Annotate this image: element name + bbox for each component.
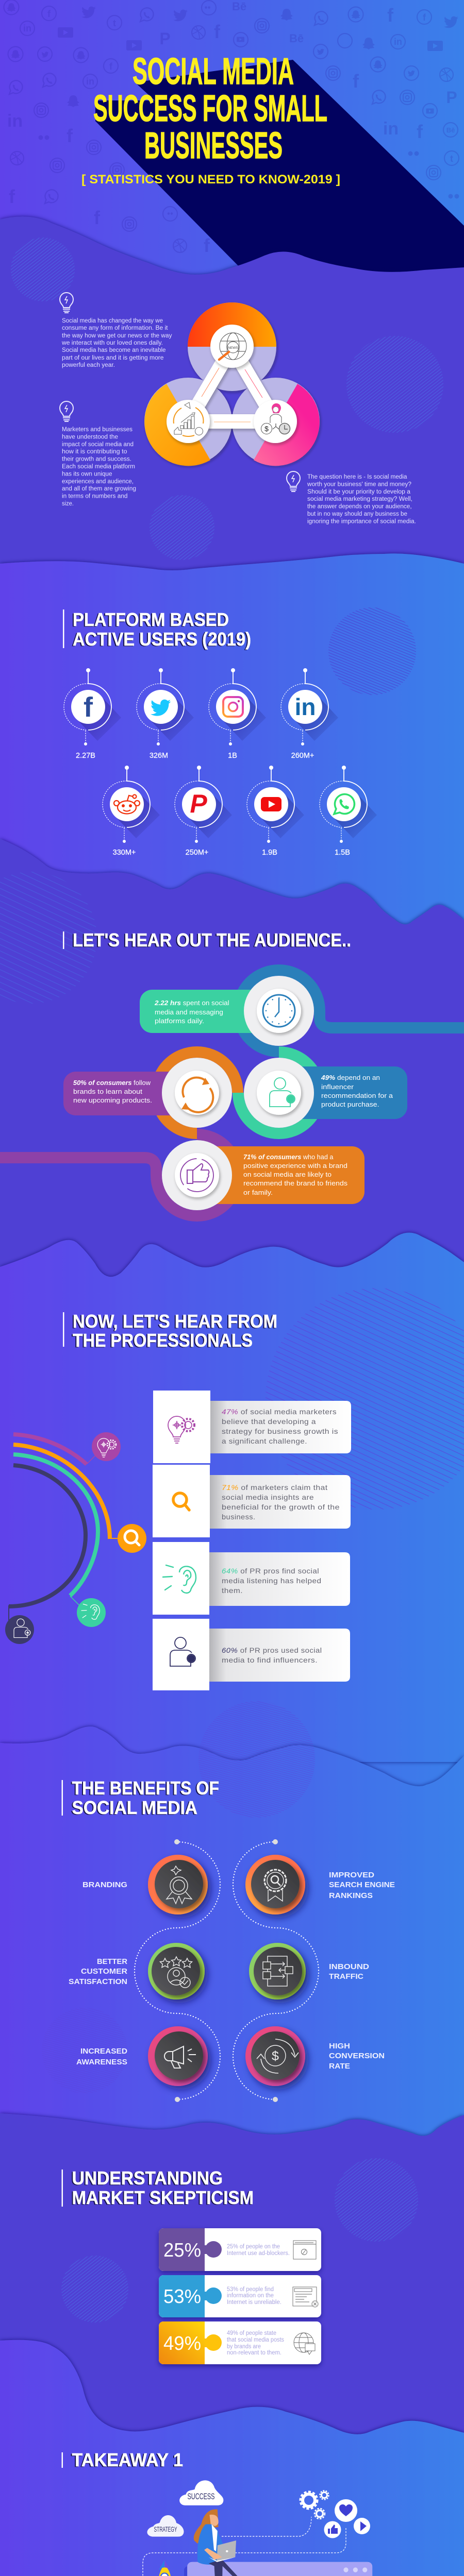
pill: 49% influencer: recommendation for a bbox=[321, 1092, 393, 1099]
text block: the question: The question here is - Is social media bbox=[307, 474, 407, 480]
text block: social media change: part of our lives and it is getting more bbox=[62, 355, 164, 361]
benefit labels right bbox=[329, 1871, 395, 2071]
social icon background pattern: f bbox=[94, 207, 101, 228]
badge: conversion rate: $ bbox=[272, 2049, 279, 2063]
news node: NEWS bbox=[228, 346, 238, 350]
panel: intro dark wave section bbox=[0, 216, 464, 670]
cloud label: STRATEGY bbox=[154, 2525, 177, 2533]
card: 64%: them. bbox=[222, 1586, 243, 1595]
text block: marketers and businesses: has its own unique bbox=[62, 471, 112, 477]
text block: marketers and businesses: and all of them are growing bbox=[62, 486, 136, 492]
benefit labels left: BETTER bbox=[97, 1958, 128, 1966]
growth node bbox=[167, 400, 210, 443]
person node bbox=[254, 400, 297, 443]
badge: customer satisfaction bbox=[148, 1943, 205, 1999]
card: 47%: a significant challenge. bbox=[222, 1437, 307, 1445]
window and chart bbox=[184, 2562, 372, 2576]
card: 53% bbox=[159, 2275, 321, 2317]
panel: takeaway bbox=[0, 2340, 464, 2576]
benefit labels right: TRAFFIC bbox=[329, 1973, 364, 1981]
text block: the question: Should it be your priority to develop a bbox=[307, 489, 411, 495]
pill: 2.22 hrs: 2.22 hrs spent on social bbox=[154, 999, 229, 1007]
card: 47%: 47% of social media marketers bbox=[222, 1408, 337, 1416]
pill: 49% influencer: product purchase. bbox=[321, 1100, 379, 1108]
dashed connectors bbox=[143, 2517, 346, 2576]
panel: professionals bbox=[0, 1232, 464, 1762]
rocket bbox=[153, 2560, 177, 2576]
icon: youtube bbox=[247, 766, 304, 843]
card: 71%: business. bbox=[222, 1513, 256, 1521]
text block: social media change: consume any form of information. Be it bbox=[62, 325, 168, 331]
arc node: strategy bbox=[92, 1432, 121, 1461]
platform user counts: 260M+ bbox=[291, 752, 314, 760]
hatched circle bbox=[61, 2256, 128, 2323]
pill: 50% of consumers bbox=[63, 1072, 203, 1115]
card: 64%: media listening has helped bbox=[222, 1577, 322, 1585]
heading: professionals bbox=[63, 1311, 277, 1351]
platform user counts: 1.5B bbox=[335, 849, 350, 857]
illustration bbox=[80, 2480, 384, 2576]
text block: marketers and businesses: impact of social media and bbox=[62, 442, 134, 448]
pill: 2.22 hrs bbox=[140, 990, 294, 1033]
pill: 71% of consumers: positive experience with a brand bbox=[243, 1162, 347, 1170]
pill: 50% of consumers: 50% of consumers follow bbox=[73, 1079, 151, 1087]
top segment bbox=[188, 302, 276, 347]
icon: bulb bbox=[60, 401, 73, 421]
heading: platform based bbox=[63, 609, 251, 650]
heading: skepticism: MARKET SKEPTICISM bbox=[72, 2187, 254, 2208]
pill: 50% of consumers: brands to learn about bbox=[73, 1088, 142, 1095]
social icon background pattern: f bbox=[417, 121, 423, 142]
icon: refresh bbox=[162, 1058, 232, 1128]
heading: platform based: ACTIVE USERS (2019) bbox=[73, 629, 251, 650]
social icon background pattern: in bbox=[383, 119, 399, 139]
pill: 49% influencer: 49% depend on an bbox=[321, 1074, 380, 1081]
card: 64%: 64% of PR pros find social bbox=[222, 1567, 319, 1575]
social icon background pattern: f bbox=[423, 12, 426, 23]
benefit labels right: CONVERSION bbox=[329, 2052, 385, 2060]
news node bbox=[210, 325, 254, 368]
social icon background pattern: Bē bbox=[289, 32, 304, 45]
card: 49%: that social media posts bbox=[227, 2337, 284, 2343]
benefit labels right: RATE bbox=[329, 2062, 350, 2071]
text block: social media change: Social media has become an inevitable bbox=[62, 347, 166, 353]
text block: marketers and businesses: Marketers and businesses bbox=[62, 427, 132, 433]
social icon background pattern: f bbox=[47, 9, 51, 19]
social icon background pattern: P bbox=[159, 29, 171, 48]
triangle diagram bbox=[144, 302, 320, 466]
pill: 71% of consumers: on social media are likely to bbox=[243, 1171, 332, 1178]
icon: facebook bbox=[64, 668, 121, 745]
card: 53%: 53% bbox=[163, 2286, 201, 2308]
text block: social media change: powerful each year. bbox=[62, 362, 115, 368]
arc chart bbox=[9, 1434, 124, 1623]
card: 25%: 25% of people on the bbox=[227, 2244, 280, 2250]
social icon background pattern: f bbox=[387, 5, 394, 26]
icon: whatsapp bbox=[320, 766, 377, 843]
flow rings bbox=[0, 970, 464, 1216]
benefit labels left: INCREASED bbox=[80, 2047, 127, 2056]
platform user counts: 1.9B bbox=[262, 849, 277, 857]
badge: inbound traffic bbox=[249, 1943, 306, 1999]
hatched circle bbox=[328, 607, 416, 695]
card: 53%: information on the bbox=[227, 2293, 274, 2299]
social icon background pattern: in bbox=[7, 111, 23, 131]
person node: $ bbox=[264, 425, 269, 433]
pill: 49% influencer bbox=[268, 1066, 407, 1119]
text block: the question bbox=[307, 474, 416, 524]
icon: linkedin bbox=[281, 668, 338, 745]
heading: takeaway: TAKEAWAY 1 bbox=[72, 2449, 183, 2470]
panel: audience bbox=[0, 839, 464, 1288]
icon: facebook: f bbox=[84, 692, 93, 723]
icon: reddit bbox=[103, 766, 160, 843]
social icon background pattern bbox=[4, 0, 459, 256]
platform user counts bbox=[76, 752, 350, 857]
gears and social icons bbox=[300, 2490, 370, 2538]
card: 71%: beneficial for the growth of the bbox=[222, 1503, 340, 1511]
social icon background pattern: in bbox=[23, 23, 31, 33]
benefit labels left: AWARENESS bbox=[76, 2058, 127, 2066]
benefit labels right: RANKINGS bbox=[329, 1892, 373, 1900]
card: 49%: 49% bbox=[163, 2333, 201, 2354]
benefit labels right: INBOUND bbox=[329, 1963, 369, 1971]
card: 25%: 25% bbox=[163, 2240, 201, 2261]
subtitle: [ STATISTICS YOU NEED TO KNOW-2019 ] bbox=[81, 173, 340, 187]
card: 49%: non-relevant to them. bbox=[227, 2350, 281, 2356]
pill: 50% of consumers: new upcoming products. bbox=[73, 1096, 152, 1104]
text block: marketers and businesses: how it is contributing to bbox=[62, 449, 127, 455]
card: 47%: strategy for business growth is bbox=[222, 1427, 338, 1435]
card: 49%: 49% of people state bbox=[227, 2330, 276, 2336]
pill: 2.22 hrs: media and messaging bbox=[155, 1008, 223, 1016]
heading: skepticism bbox=[62, 2167, 254, 2208]
badge: branding bbox=[148, 1855, 208, 1914]
hatched circle bbox=[198, 1701, 315, 1818]
hatched circle bbox=[150, 495, 214, 560]
text block: marketers and businesses: experiences and audience, bbox=[62, 479, 134, 485]
pill: 71% of consumers: recommend the brand to friends bbox=[243, 1179, 348, 1187]
heading: audience: LET'S HEAR OUT THE AUDIENCE.. bbox=[73, 929, 351, 951]
text block: marketers and businesses: have understood the bbox=[62, 434, 118, 440]
pill: 71% of consumers: 71% of consumers who had a bbox=[243, 1153, 334, 1161]
text block: social media change: Social media has changed the way we bbox=[62, 318, 163, 324]
social icon background pattern: f bbox=[214, 21, 221, 42]
badge: conversion rate bbox=[245, 2026, 305, 2086]
icon: bulb bbox=[60, 293, 73, 313]
social icon background pattern: t bbox=[450, 154, 453, 164]
card: 71%: 71% of marketers claim that bbox=[222, 1483, 328, 1492]
social icon background pattern: f bbox=[353, 71, 359, 92]
hatched circle bbox=[266, 1288, 464, 1510]
arc node: search bbox=[118, 1524, 146, 1553]
heading: skepticism: UNDERSTANDING bbox=[72, 2167, 223, 2189]
title: SOCIAL MEDIA bbox=[132, 51, 294, 92]
social icon background pattern: P bbox=[446, 88, 457, 107]
benefit labels right: SEARCH ENGINE bbox=[329, 1881, 395, 1889]
card: 53%: Internet is unreliable. bbox=[227, 2299, 281, 2306]
hatched circle bbox=[346, 336, 443, 433]
social icon background pattern: f bbox=[67, 125, 73, 146]
text block: the question: the answer depends on your audience, bbox=[307, 504, 412, 510]
card: 60%: media to find influencers. bbox=[222, 1656, 318, 1664]
pill: 71% of consumers bbox=[196, 1146, 364, 1204]
heading: benefits bbox=[62, 1777, 219, 1818]
pill: 2.22 hrs: platforms daily. bbox=[155, 1017, 204, 1025]
icon: pinterest bbox=[175, 766, 232, 843]
hatched circle bbox=[11, 238, 75, 301]
title: BUSINESSES bbox=[144, 125, 283, 166]
panel: benefits bbox=[0, 1726, 464, 2164]
panel: market skepticism bbox=[0, 2113, 464, 2473]
text block: the question: worth your business' time and money? bbox=[307, 481, 411, 487]
left segment bbox=[144, 384, 210, 466]
arc node: listening bbox=[77, 1598, 106, 1627]
card: 47%: believe that developing a bbox=[222, 1417, 316, 1426]
panel: platform users bbox=[0, 553, 464, 979]
icon: linkedin: in bbox=[295, 693, 316, 720]
icon: thumbs up bbox=[162, 1140, 232, 1210]
benefit labels left: CUSTOMER bbox=[81, 1968, 128, 1976]
title bbox=[93, 51, 327, 166]
dotted path endpoints bbox=[174, 1839, 278, 2102]
platform user counts: 250M+ bbox=[186, 849, 208, 857]
social icon background pattern: f bbox=[109, 61, 113, 72]
clouds bbox=[147, 2480, 223, 2537]
badge: search rankings bbox=[245, 1855, 305, 1914]
icon: clock bbox=[244, 976, 314, 1046]
text block: marketers and businesses: size. bbox=[62, 501, 74, 507]
text block: social media change: we interact with our loved ones daily. bbox=[61, 340, 163, 346]
social icon background pattern: in bbox=[86, 76, 94, 87]
hatched circle bbox=[335, 2158, 418, 2242]
social icon background pattern: t bbox=[113, 18, 116, 28]
card: 49% bbox=[159, 2321, 321, 2364]
icon: bulb bbox=[287, 471, 300, 492]
heading: benefits: SOCIAL MEDIA bbox=[72, 1797, 197, 1818]
text block: marketers and businesses: Each social media platform bbox=[62, 464, 135, 470]
platform user counts: 330M+ bbox=[113, 849, 136, 857]
text block: the question: social media marketing strategy? Well, bbox=[307, 496, 412, 502]
card: 71% bbox=[153, 1465, 351, 1537]
text block: marketers and businesses: their growth and success. bbox=[62, 456, 131, 463]
text block: social media change: the way how we get our news or the way bbox=[62, 333, 172, 339]
card: 60% bbox=[153, 1619, 350, 1690]
card: 47% bbox=[153, 1391, 351, 1463]
badge: awareness bbox=[148, 2026, 208, 2086]
heading: professionals: NOW, LET'S HEAR FROM bbox=[73, 1311, 277, 1332]
person: sitting woman bbox=[194, 2509, 251, 2576]
heading: platform based: PLATFORM BASED bbox=[73, 609, 229, 630]
icon: pinterest: P bbox=[190, 789, 207, 818]
card: 71%: social media insights are bbox=[222, 1493, 314, 1501]
icon: influencer bbox=[244, 1058, 314, 1128]
text block: marketers and businesses bbox=[62, 427, 136, 507]
connecting bars bbox=[188, 347, 276, 421]
benefit labels left: SATISFACTION bbox=[69, 1978, 127, 1986]
social icon background pattern: in bbox=[394, 37, 402, 47]
heading: benefits: THE BENEFITS OF bbox=[72, 1777, 219, 1799]
text block: the question: but in no way should any business be bbox=[307, 511, 407, 517]
social icon background pattern: f bbox=[204, 235, 210, 256]
card: 25%: Internet use ad-blockers. bbox=[227, 2250, 290, 2257]
heading: professionals: THE PROFESSIONALS bbox=[73, 1330, 253, 1351]
card: 25% bbox=[159, 2228, 321, 2271]
benefit labels left: BRANDING bbox=[82, 1881, 127, 1889]
social icon background pattern: f bbox=[9, 186, 15, 207]
hatched circle bbox=[42, 2008, 127, 2093]
pill: 49% influencer: influencer bbox=[321, 1083, 354, 1091]
benefit labels right: IMPROVED bbox=[329, 1871, 374, 1879]
card: 53%: 53% of people find bbox=[227, 2286, 274, 2293]
dotted paths bbox=[135, 1842, 319, 2099]
hatched circle bbox=[0, 872, 97, 1004]
platform user counts: 1B bbox=[228, 752, 237, 760]
benefit labels left bbox=[69, 1881, 128, 2066]
icon: instagram bbox=[209, 668, 266, 745]
platform user counts: 326M bbox=[150, 752, 168, 760]
text block: marketers and businesses: in terms of numbers and bbox=[62, 494, 128, 500]
pill: 71% of consumers: or family. bbox=[243, 1189, 273, 1196]
text block: social media change bbox=[61, 318, 172, 368]
social icon background pattern: Bē bbox=[446, 126, 455, 134]
platform user counts: 2.27B bbox=[76, 752, 95, 760]
card: 64% bbox=[153, 1542, 350, 1615]
cloud label: SUCCESS bbox=[188, 2492, 214, 2501]
title long shadow bbox=[95, 60, 464, 273]
benefit labels right: HIGH bbox=[329, 2042, 350, 2050]
arc node: influencers bbox=[5, 1615, 34, 1644]
icon: twitter bbox=[137, 668, 194, 745]
text block: the question: ignoring the importance of social media. bbox=[307, 518, 416, 524]
card: 49%: by brands are bbox=[227, 2344, 261, 2350]
card: 60%: 60% of PR pros used social bbox=[222, 1646, 322, 1654]
social icon background pattern: Bē bbox=[232, 0, 246, 13]
right segment bbox=[254, 384, 320, 466]
